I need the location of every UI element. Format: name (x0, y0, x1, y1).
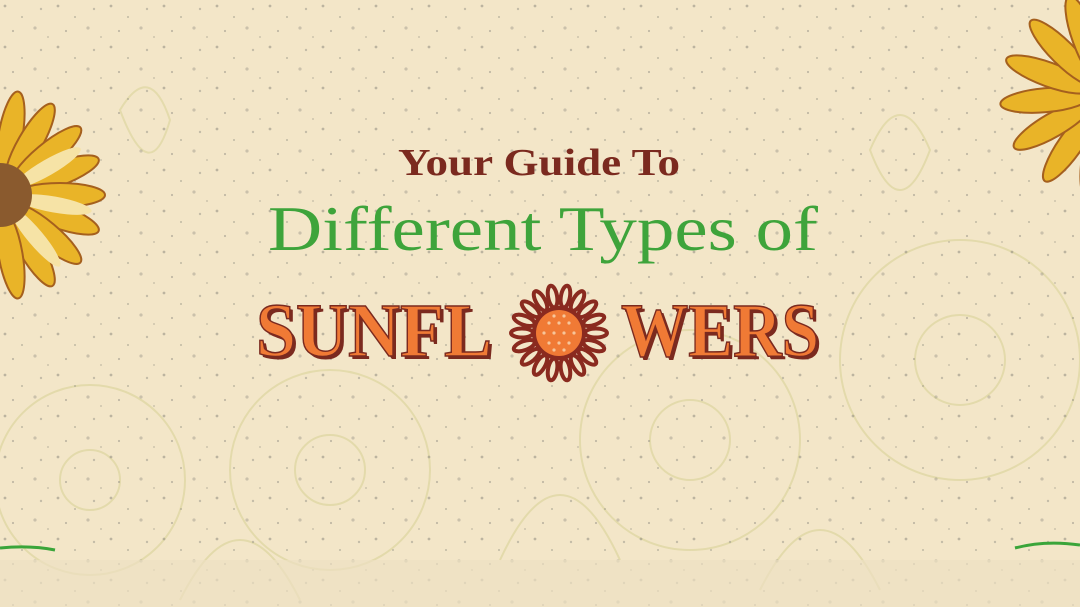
heading: Your Guide To: Your Guide To (398, 142, 680, 184)
heading: Different Types of: Different Types of (268, 193, 819, 264)
left sunflower (0, 90, 105, 300)
right sunflower (999, 0, 1080, 200)
title: SUNFLOWERS: SUNFL (259, 292, 495, 376)
icon: sunflower O (511, 285, 607, 381)
title: SUNFLOWERS: SUNFL (256, 289, 492, 373)
green sprigs (0, 543, 1080, 550)
title: SUNFLOWERS: WERS (624, 292, 822, 376)
title: SUNFLOWERS: WERS (621, 289, 819, 373)
title: SUNFLOWERS (256, 289, 822, 376)
